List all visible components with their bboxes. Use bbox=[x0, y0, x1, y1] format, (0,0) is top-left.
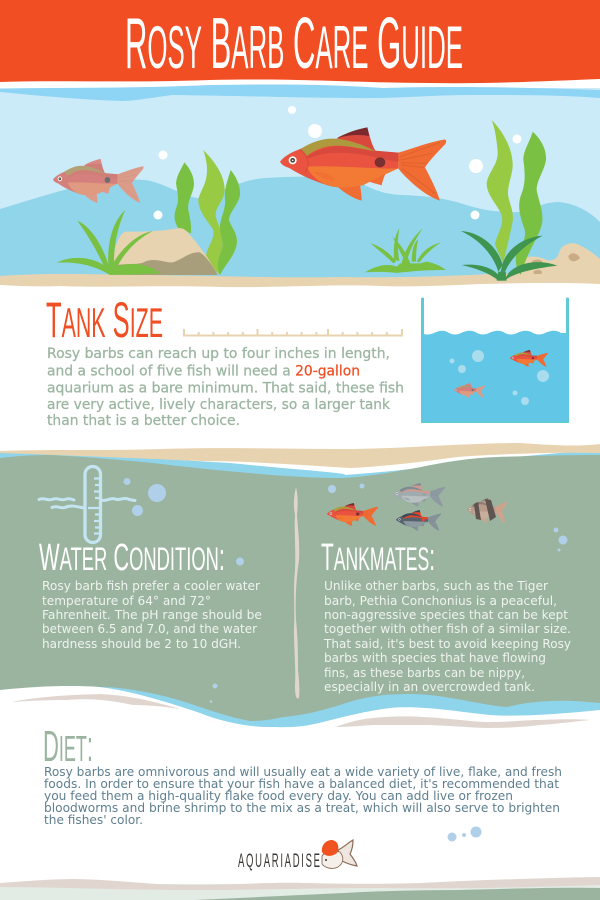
plant: centre grass bbox=[365, 228, 446, 273]
heading: tankmates: TANKMATES: bbox=[321, 537, 435, 579]
paragraph: tankmates: That said, it's best to avoid keeping Rosy bbox=[323, 637, 571, 651]
sand and water divider bbox=[0, 443, 600, 500]
rock spots bbox=[532, 253, 580, 275]
paragraph: tankmates: especially in an overcrowded tank. bbox=[324, 680, 535, 694]
water surface wave bbox=[0, 84, 600, 101]
icon: thermometer in water bbox=[39, 466, 135, 542]
logo wordmark: AQUARIADISE bbox=[238, 851, 320, 872]
panel: tank size bbox=[46, 292, 569, 429]
logo: aquariadise bbox=[238, 840, 357, 872]
paragraph: water condition: Rosy barb fish prefer a cooler water bbox=[42, 579, 260, 593]
paragraph: tank size: and a school of five fish will need a 20-gallon bbox=[47, 364, 360, 380]
vertical divider bbox=[294, 487, 299, 698]
bubbles: water condition bbox=[124, 478, 568, 703]
paragraph: tank size: aquarium as a bare minimum. That said, these fish bbox=[47, 380, 404, 396]
left sand streak bbox=[12, 694, 180, 709]
plant: tall light kelp bbox=[198, 150, 225, 275]
plant: right kelp bbox=[516, 132, 546, 275]
paragraph: diet: you feed them a high-quality flake food every day. You can add live or frozen bbox=[44, 788, 513, 803]
heading: diet: DIET: bbox=[43, 722, 93, 771]
rock bbox=[113, 228, 218, 275]
plant: left grass bbox=[57, 210, 161, 275]
bubbles bbox=[154, 106, 522, 220]
header banner bbox=[0, 0, 600, 83]
paragraph: tankmates: together with other fish of a similar size. bbox=[324, 622, 571, 636]
paragraph: water condition: hardness should be 2 to 10 dGH. bbox=[42, 637, 241, 651]
blue wave below green bbox=[95, 680, 600, 727]
sand floor bbox=[0, 274, 600, 287]
title: ROSY BARB CARE GUIDE bbox=[125, 4, 463, 84]
plant: dark green fronds bbox=[461, 231, 557, 281]
bubbles: diet bbox=[448, 826, 482, 842]
paragraph: tank size: Rosy barbs can reach up to four inches in length, bbox=[47, 346, 390, 362]
paragraph: tank size bbox=[47, 346, 404, 429]
rock shadow bbox=[117, 252, 218, 275]
illustration: tankmate fish group bbox=[327, 483, 507, 531]
paragraph: tankmates: barbs with species that have flowing bbox=[324, 651, 546, 665]
plant: kelp behind rock bbox=[175, 162, 194, 233]
fish: pale rosy barb bbox=[53, 159, 144, 203]
paragraph: diet: foods. In order to ensure that your fish have a balanced diet, it's recommended that bbox=[44, 776, 559, 791]
background hills bbox=[0, 177, 600, 283]
plant: front kelp bbox=[218, 170, 240, 275]
paragraph: tank size: are very active, lively characters, so a larger tank bbox=[47, 397, 391, 413]
illustration: aquarium tank bbox=[421, 299, 569, 423]
paragraph: tankmates: barb, Pethia Conchonius is a peaceful, bbox=[324, 594, 557, 608]
paragraph: water condition: between 6.5 and 7.0, and the water bbox=[42, 622, 257, 636]
heading: tank size: TANK SIZE bbox=[46, 292, 163, 348]
heading: water condition: WATER CONDITION: bbox=[39, 537, 225, 579]
paragraph: diet bbox=[44, 764, 562, 827]
plant: tall right kelp bbox=[487, 120, 513, 263]
paragraph: tankmates: fins, as these barbs can be nippy, bbox=[324, 666, 525, 680]
paragraph: tank size: than that is a better choice. bbox=[47, 413, 240, 429]
paragraph: water condition bbox=[42, 579, 262, 651]
right sand streak bbox=[335, 716, 590, 728]
panel: green section background bbox=[0, 455, 600, 728]
paragraph: water condition: Fahrenheit. The pH range should be bbox=[42, 608, 262, 622]
fish: large rosy barb bbox=[280, 127, 446, 201]
paragraph: tankmates: Unlike other barbs, such as the Tiger bbox=[324, 579, 548, 593]
paragraph: tankmates bbox=[323, 579, 571, 694]
panel: underwater scene bbox=[0, 84, 600, 287]
paragraph: water condition: temperature of 64° and 72° bbox=[42, 594, 211, 608]
right rock bbox=[507, 243, 600, 282]
logo goldfish bbox=[322, 840, 357, 868]
paragraph: tankmates: non-aggressive species that can be kept bbox=[324, 608, 568, 622]
ruler decoration bbox=[184, 329, 402, 336]
paragraph: diet: bloodworms and brine shrimp to the mix as a treat, which will also serve to brighten bbox=[44, 800, 560, 815]
paragraph: diet: Rosy barbs are omnivorous and will usually eat a wide variety of live, flake, and fresh bbox=[44, 764, 562, 779]
paragraph: diet: the fishes' color. bbox=[44, 812, 143, 827]
footer wave bbox=[0, 877, 600, 900]
